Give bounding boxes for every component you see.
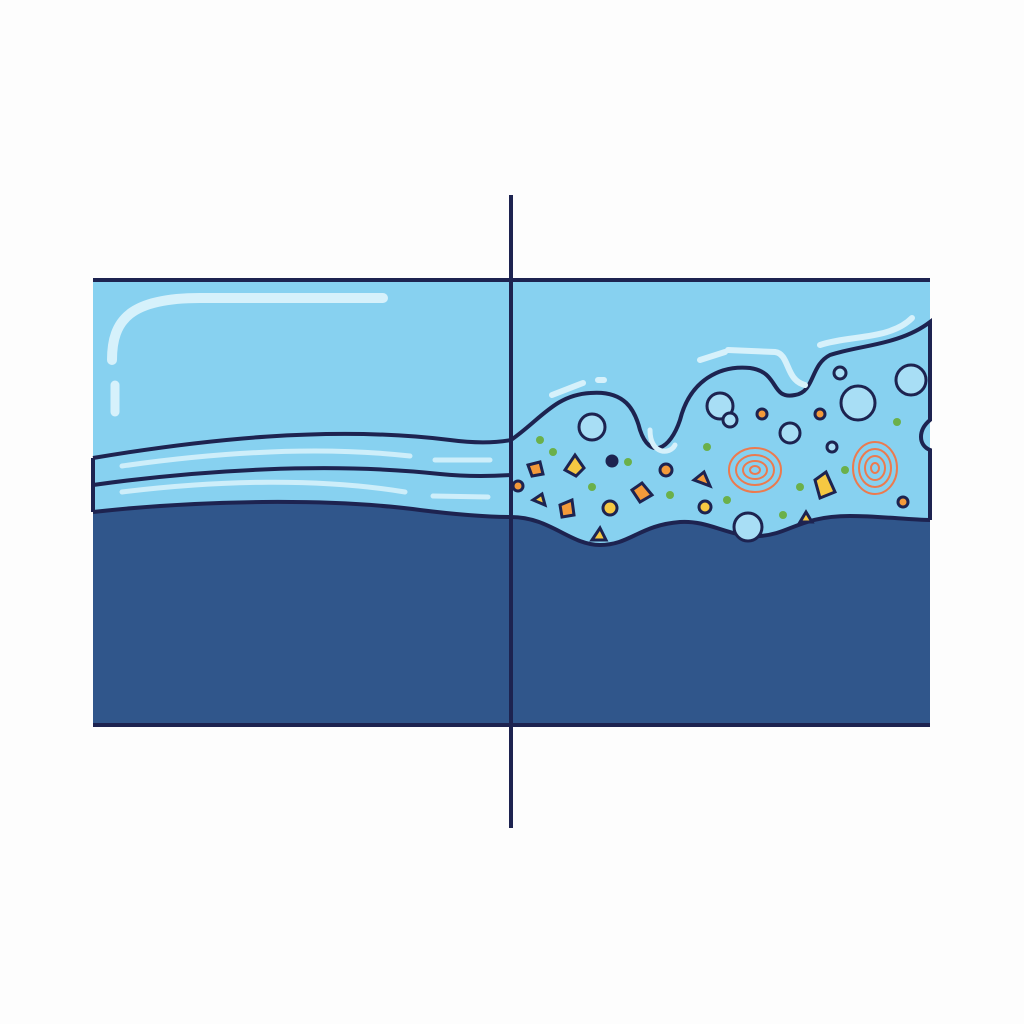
left coating layers <box>93 434 511 497</box>
contaminated layer right <box>511 318 930 541</box>
bubbles <box>579 365 926 541</box>
frame lines <box>93 280 930 725</box>
glass highlight <box>112 298 383 412</box>
panel: dark base layer <box>93 502 930 725</box>
panel: light blue background <box>93 280 930 725</box>
divider: vertical line <box>509 195 513 828</box>
debris particles <box>513 409 908 540</box>
fingerprints <box>729 442 897 494</box>
